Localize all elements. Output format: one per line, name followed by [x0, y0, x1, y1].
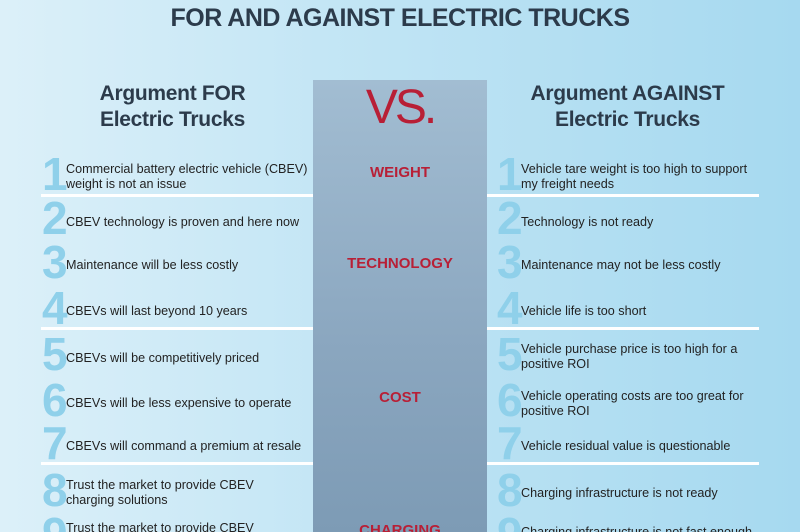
left numbers: 3 — [42, 236, 66, 288]
left texts: CBEVs will be competitively priced — [66, 351, 259, 365]
title: FOR AND AGAINST ELECTRIC TRUCKS — [170, 4, 630, 32]
category: cost: COST — [379, 389, 421, 406]
category: technology: TECHNOLOGY — [347, 255, 453, 272]
left numbers: 6 — [42, 374, 66, 426]
right numbers: 1 — [497, 148, 521, 200]
left numbers — [42, 148, 68, 532]
right texts: positive ROI — [521, 404, 590, 418]
heading: against: Electric Trucks — [555, 108, 700, 131]
right numbers: 5 — [497, 328, 521, 380]
left texts: CBEVs will command a premium at resale — [66, 439, 301, 453]
left numbers: 8 — [42, 464, 66, 516]
left texts: CBEV technology is proven and here now — [66, 215, 299, 229]
left texts: CBEVs will be less expensive to operate — [66, 396, 291, 410]
left numbers: 5 — [42, 328, 66, 380]
left numbers: 4 — [42, 282, 66, 334]
left texts: charging solutions — [66, 493, 168, 507]
category: weight: WEIGHT — [370, 164, 430, 181]
left texts: Maintenance will be less costly — [66, 258, 238, 272]
left texts: weight is not an issue — [66, 177, 186, 191]
center column — [313, 80, 487, 532]
right texts: my freight needs — [521, 177, 614, 191]
heading: against: Argument AGAINST — [531, 82, 724, 105]
vs: VS. — [366, 81, 434, 134]
right texts: Maintenance may not be less costly — [521, 258, 721, 272]
right numbers: 8 — [497, 464, 521, 516]
heading: against — [531, 82, 724, 131]
left texts: Commercial battery electric vehicle (CBEV) — [66, 162, 307, 176]
right numbers: 4 — [497, 282, 521, 334]
heading: for: Electric Trucks — [100, 108, 245, 131]
right texts: positive ROI — [521, 357, 590, 371]
left texts: CBEVs will last beyond 10 years — [66, 304, 247, 318]
right texts — [521, 162, 752, 532]
left numbers: 1 — [42, 148, 66, 200]
right numbers: 3 — [497, 236, 521, 288]
left numbers: 7 — [42, 417, 66, 469]
right texts: Technology is not ready — [521, 215, 653, 229]
heading: for — [100, 82, 246, 131]
left texts: Trust the market to provide CBEV — [66, 478, 254, 492]
heading: for: Argument FOR — [100, 82, 245, 105]
right texts: Vehicle tare weight is too high to support — [521, 162, 747, 176]
separators — [41, 194, 759, 197]
right numbers: 7 — [497, 417, 521, 469]
right numbers: 2 — [497, 192, 521, 244]
left numbers: 2 — [42, 192, 66, 244]
right texts: Vehicle operating costs are too great for — [521, 389, 744, 403]
right texts: Vehicle life is too short — [521, 304, 646, 318]
right numbers: 6 — [497, 374, 521, 426]
right texts: Charging infrastructure is not ready — [521, 486, 718, 500]
right texts: Vehicle purchase price is too high for a — [521, 342, 737, 356]
right texts: Vehicle residual value is questionable — [521, 439, 730, 453]
left texts — [66, 162, 307, 532]
right numbers — [497, 148, 522, 532]
